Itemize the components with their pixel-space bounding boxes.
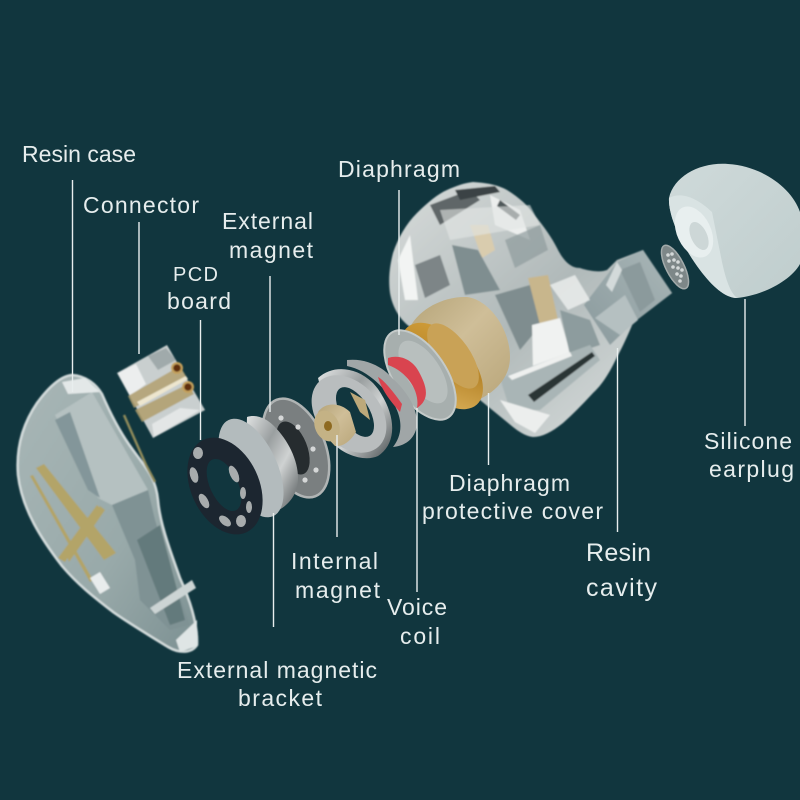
- icon: internal magnet: [309, 404, 356, 446]
- gold cross pattern: [30, 464, 116, 582]
- label: Resin case: Resin case: [22, 141, 136, 167]
- icon: connector block: [117, 345, 205, 438]
- label: External magnet: External: [222, 208, 313, 234]
- label: External magnetic bracket: [177, 657, 377, 711]
- label: Resin cavity: Resin: [586, 539, 651, 567]
- icon: voice coil: [378, 357, 426, 412]
- label: Silicone earplug: earplug: [709, 456, 794, 482]
- label: Voice coil: Voice: [387, 594, 447, 620]
- label: Internal magnet: [291, 548, 381, 603]
- label: Connector: Connector: [83, 192, 199, 218]
- label: Resin cavity: cavity: [586, 574, 658, 602]
- icon: diaphragm protective cover: [386, 297, 510, 424]
- label: Diaphragm: Diaphragm: [338, 156, 460, 182]
- label: Internal magnet: magnet: [295, 577, 381, 603]
- label: External magnet: magnet: [229, 237, 314, 263]
- icon: back magnet ring: [347, 360, 417, 447]
- label: External magnetic bracket: External magnetic: [177, 657, 377, 683]
- icon: external magnetic bracket: [205, 389, 342, 527]
- icon: resin cavity: [389, 182, 672, 437]
- icon: mesh filter: [656, 242, 694, 292]
- label: Silicone earplug: [704, 428, 794, 482]
- label: External magnet: [222, 208, 314, 263]
- label: Diaphragm protective cover: Diaphragm: [449, 470, 570, 496]
- icon: PCB board ring: [173, 425, 277, 547]
- icon: external magnet front ring: [297, 361, 401, 467]
- label: PCD board: [167, 264, 231, 314]
- label: Diaphragm protective cover: [422, 470, 603, 524]
- label: Voice coil: coil: [400, 623, 440, 649]
- label: Diaphragm protective cover: protective cover: [422, 498, 603, 524]
- label: Voice coil: [387, 594, 447, 649]
- icon: silicone earplug: [667, 164, 800, 298]
- leader lines: [72, 180, 745, 627]
- label: Silicone earplug: Silicone: [704, 428, 792, 454]
- icon: diaphragm ring: [370, 318, 470, 432]
- label: PCD board: PCD: [173, 264, 218, 286]
- label: Internal magnet: Internal: [291, 548, 378, 574]
- label: PCD board: board: [167, 288, 231, 314]
- icon: resin case shell: [18, 375, 197, 652]
- label: Resin cavity: [586, 539, 658, 602]
- label: External magnetic bracket: bracket: [238, 685, 323, 711]
